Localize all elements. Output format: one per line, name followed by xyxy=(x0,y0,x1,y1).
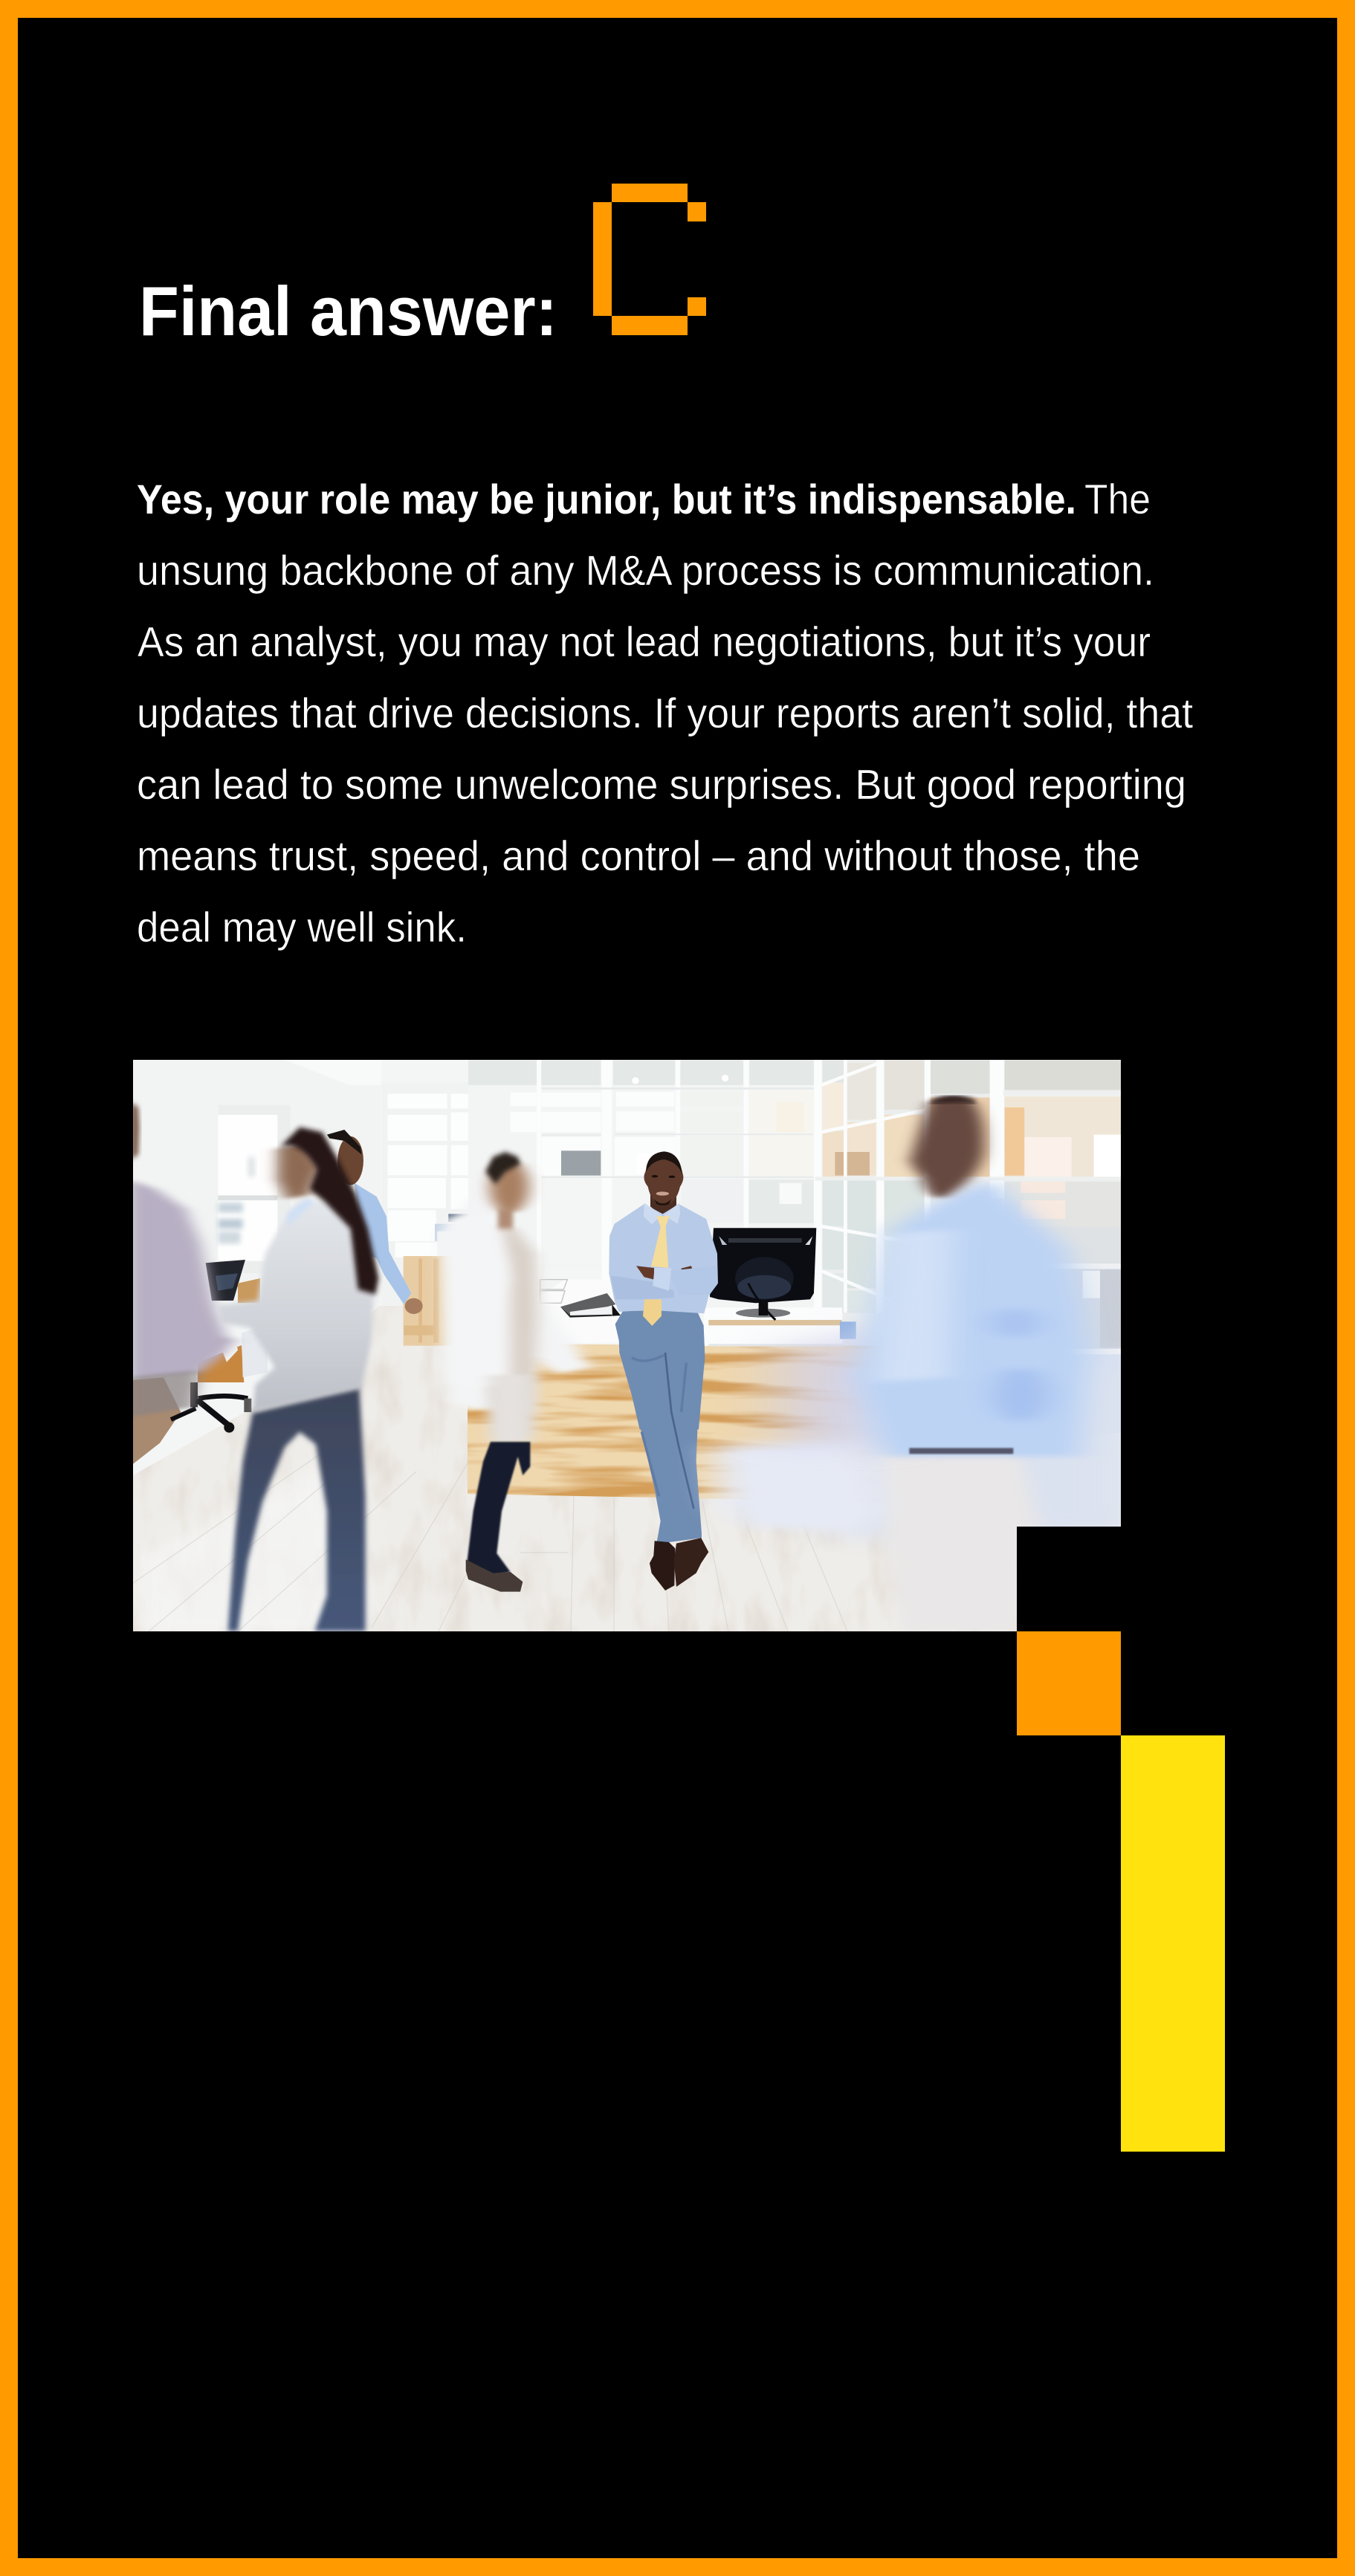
shirt collar xyxy=(644,1203,662,1224)
left desk wood xyxy=(133,1377,181,1464)
jacket woman shoe xyxy=(466,1559,523,1592)
person: woman in white jacket xyxy=(441,1152,591,1437)
centre man eyes xyxy=(652,1175,675,1178)
paragraph line 3: As an analyst, you may not lead negotiations, but it’s your xyxy=(138,618,1151,666)
centre man smile xyxy=(656,1191,669,1196)
photo: office with employees in motion xyxy=(129,1060,1145,1631)
person: blurred man in pale blue shirt at right xyxy=(714,1097,1145,1631)
right man trousers xyxy=(877,1446,1041,1631)
right man hair xyxy=(931,1097,975,1102)
monitor seen from behind xyxy=(710,1228,816,1320)
floor plank joints xyxy=(133,1449,847,1631)
decorative block: orange square xyxy=(1017,1631,1121,1735)
centre man lower body xyxy=(619,1338,708,1590)
paragraph line 4: updates that drive decisions. If your reports aren’t solid, that xyxy=(137,690,1193,737)
yellow tie lower xyxy=(643,1299,662,1326)
shirt cuff xyxy=(653,1268,671,1291)
glass partition centre xyxy=(468,1060,814,1223)
centre man neck xyxy=(650,1194,676,1217)
paragraph line 6: means trust, speed, and control – and without those, the xyxy=(137,832,1140,880)
rear woman hand xyxy=(405,1298,423,1314)
skirt xyxy=(488,1375,531,1443)
left wall, window and rear panes xyxy=(216,1115,468,1261)
office chair xyxy=(171,1364,251,1433)
left forearm skin xyxy=(636,1266,654,1280)
glass partition right with warm office beyond xyxy=(815,1060,1121,1373)
black tights xyxy=(467,1442,530,1576)
orange box xyxy=(197,1345,244,1382)
jacket woman hair xyxy=(485,1152,520,1184)
centre man head xyxy=(644,1159,683,1206)
rear woman head xyxy=(337,1136,363,1185)
jacket woman face xyxy=(490,1161,528,1213)
paragraph line 7: deal may well sink. xyxy=(137,904,467,951)
paragraph line 5: can lead to some unwelcome surprises. But good reporting xyxy=(137,761,1186,809)
white jacket front panel xyxy=(448,1214,511,1388)
desk wood base xyxy=(468,1344,868,1499)
floor planks base xyxy=(133,1306,908,1631)
right man shirt pale stripes xyxy=(875,1229,954,1382)
walking woman collar xyxy=(288,1198,314,1226)
floor xyxy=(133,1306,1017,1631)
paragraph line 2: unsung backbone of any M&A process is communication. xyxy=(137,547,1154,595)
rear woman shirt xyxy=(355,1183,411,1304)
right man shirt lower shadow xyxy=(994,1368,1048,1422)
centre man trousers lower xyxy=(619,1338,705,1544)
body paragraph xyxy=(137,476,1193,951)
desk wood grain xyxy=(468,1347,847,1498)
photo background wall xyxy=(133,1060,1121,1505)
crossed sleeve xyxy=(611,1276,674,1299)
white jacket xyxy=(441,1194,591,1414)
centre man shirt xyxy=(609,1204,718,1313)
beige blouse and skirt xyxy=(491,1224,537,1437)
trouser crease shadow xyxy=(665,1353,693,1509)
shirt collar right xyxy=(664,1203,680,1224)
bold lead sentence: Yes, your role may be junior, but it’s indispensable. xyxy=(137,476,1076,522)
rear woman hair xyxy=(327,1130,362,1154)
right man arm haze xyxy=(773,1323,892,1449)
person: man standing centre with tie xyxy=(609,1151,718,1590)
loose paper xyxy=(221,1339,238,1362)
person: woman with long dark hair in grey top xyxy=(218,1127,378,1631)
decorative block: yellow bar xyxy=(1121,1735,1225,2152)
jacket head neck xyxy=(498,1209,513,1229)
rear plywood cabinet xyxy=(403,1256,450,1346)
left shoe xyxy=(650,1541,675,1590)
mauve figure head xyxy=(132,1102,139,1159)
jacket woman lower body xyxy=(466,1375,531,1592)
person: blurred mauve shirt at left xyxy=(129,1102,236,1417)
right man carried object xyxy=(714,1438,885,1531)
crossed sleeve right xyxy=(669,1266,717,1295)
centre man beard xyxy=(654,1199,671,1206)
title: Final answer: Final answer: xyxy=(139,272,557,350)
person: woman in blue shirt, rear xyxy=(327,1130,423,1314)
right forearm skin xyxy=(682,1266,693,1271)
back-side desk monitor xyxy=(206,1260,245,1301)
right backdrop haze beneath shirt xyxy=(832,1360,1145,1538)
plywood desk front xyxy=(468,1344,873,1499)
right man shirt xyxy=(855,1179,1090,1457)
walking woman jacket xyxy=(218,1202,374,1412)
trouser fold shadow xyxy=(632,1355,686,1496)
left cabinet and office furniture xyxy=(197,1256,456,1382)
monitor highlight xyxy=(216,1273,238,1291)
desk tops and white counter xyxy=(528,1228,856,1347)
stacked letter trays xyxy=(540,1280,567,1303)
right man belt xyxy=(909,1448,1013,1454)
floor wash texture xyxy=(133,1328,889,1631)
mauve figure shirt xyxy=(129,1179,236,1380)
walking woman upper body xyxy=(218,1127,378,1412)
floor white motion haze xyxy=(133,1479,327,1631)
right man shirt shadow xyxy=(991,1308,1041,1338)
shelf unit xyxy=(238,1278,260,1303)
binder on counter xyxy=(560,1293,621,1318)
mauve figure trousers xyxy=(129,1370,201,1417)
centre man upper body xyxy=(609,1151,718,1429)
left foreground desk xyxy=(133,1364,251,1464)
icon: pixel letter C answer xyxy=(593,184,706,335)
walking woman long hair xyxy=(280,1127,378,1295)
right shoe xyxy=(674,1538,708,1587)
walking woman face xyxy=(277,1142,322,1200)
right man head xyxy=(911,1098,984,1199)
yellow tie upper xyxy=(651,1216,670,1268)
walking woman trousers xyxy=(228,1386,366,1631)
rear cabinet grain xyxy=(404,1258,439,1343)
paragraph line 1 end: The xyxy=(1084,476,1151,523)
binders on shelf xyxy=(242,1325,268,1377)
centre man hair xyxy=(646,1151,682,1174)
centre man trousers upper xyxy=(615,1304,705,1429)
